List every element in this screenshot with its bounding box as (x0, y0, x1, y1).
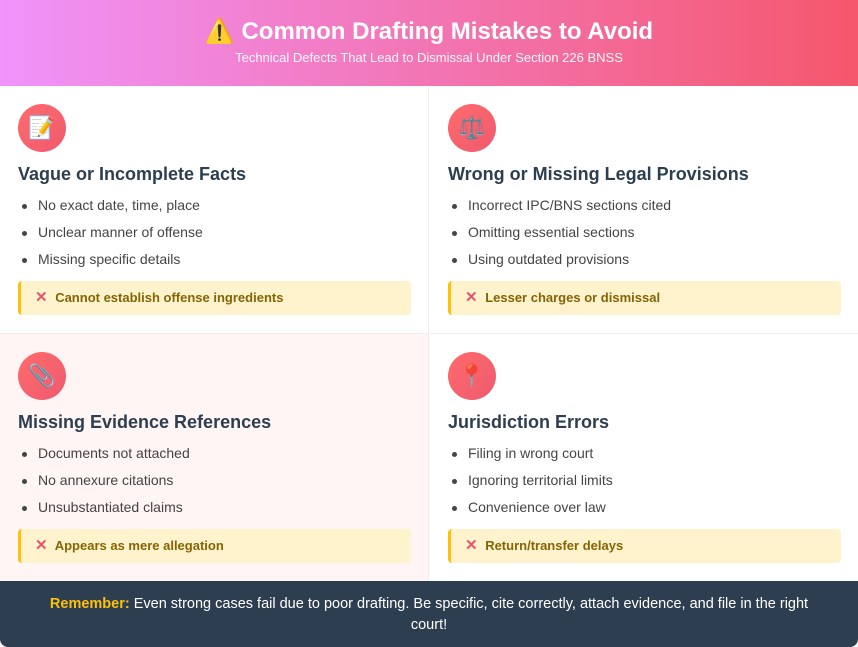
bullet list: Unsubstantiated claims (38, 499, 183, 515)
icon: document (18, 104, 66, 152)
icon: document: 📝 (28, 115, 56, 140)
panel: jurisdiction (448, 352, 841, 563)
panel: vague facts (0, 86, 429, 334)
callout (448, 281, 841, 315)
bullet list: No annexure citations (38, 472, 173, 488)
bullet list (452, 197, 671, 267)
bullet list (452, 445, 613, 515)
callout: ✕ Lesser charges or dismissal (465, 289, 660, 306)
bullet list: Using outdated provisions (468, 251, 629, 267)
bullet list: Documents not attached (38, 445, 190, 461)
heading: Vague or Incomplete Facts (18, 164, 246, 184)
icon: paperclip: 📎 (28, 363, 56, 388)
callout (448, 529, 841, 563)
bullet list: Omitting essential sections (468, 224, 635, 240)
header (0, 0, 858, 86)
heading: Missing Evidence References (18, 412, 271, 432)
title: ⚠️ Common Drafting Mistakes to Avoid (205, 18, 653, 45)
bullet list: Missing specific details (38, 251, 180, 267)
callout: ✕ Return/transfer delays (465, 537, 623, 554)
bullet list: Ignoring territorial limits (468, 472, 613, 488)
icon: scales (448, 104, 496, 152)
footer reminder: Remember: Even strong cases fail due to poor drafting. Be specific, cite correctly, attach evidence, and file in the right court! (50, 596, 808, 633)
panel: legal provisions (430, 86, 858, 334)
icon: paperclip (18, 352, 66, 400)
callout (18, 281, 411, 315)
callout: ✕ Cannot establish offense ingredients (35, 289, 283, 306)
bullet list: Filing in wrong court (468, 445, 593, 461)
heading: Wrong or Missing Legal Provisions (448, 164, 749, 184)
bullet list: No exact date, time, place (38, 197, 200, 213)
icon: pin (448, 352, 496, 400)
panel: evidence (0, 334, 429, 582)
bullet list (22, 197, 203, 267)
icon: scales: ⚖️ (458, 115, 486, 140)
bullet list: Convenience over law (468, 499, 606, 515)
heading: Jurisdiction Errors (448, 412, 609, 432)
callout: ✕ Appears as mere allegation (35, 537, 224, 554)
bullet list: Unclear manner of offense (38, 224, 203, 240)
bullet list (22, 445, 190, 515)
icon: pin: 📍 (458, 363, 486, 388)
subtitle: Technical Defects That Lead to Dismissal Under Section 226 BNSS (235, 50, 623, 65)
callout (18, 529, 411, 563)
footer reminder (0, 581, 858, 647)
bullet list: Incorrect IPC/BNS sections cited (468, 197, 671, 213)
